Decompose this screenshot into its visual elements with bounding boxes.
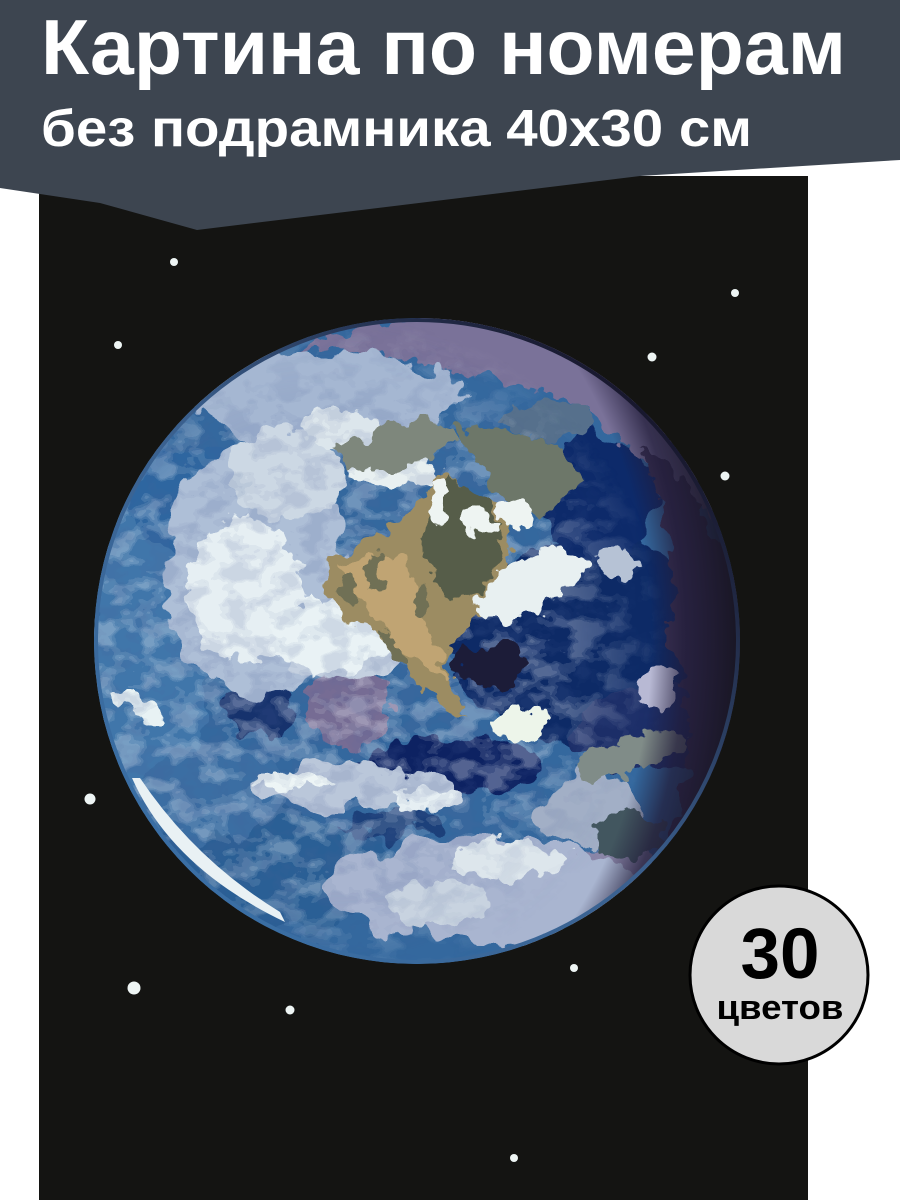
badge: 30 colours: 30 <box>741 915 819 994</box>
title: Картина по номерам <box>41 3 846 91</box>
purple limb <box>290 317 760 920</box>
soft light mottling <box>94 334 652 959</box>
badge: 30 colours <box>690 886 868 1064</box>
bright limb highlight <box>132 778 285 922</box>
ocean blues <box>90 435 730 930</box>
eastern clouds and Gulf <box>456 537 691 859</box>
dark side shading <box>578 368 740 916</box>
subtitle: без подрамника 40х30 см <box>41 100 752 158</box>
small white cloud patches over land <box>430 476 532 540</box>
land details <box>343 550 428 673</box>
badge: 30 colours: цветов <box>716 989 844 1027</box>
canvas background <box>39 176 808 1200</box>
clouds <box>165 352 640 940</box>
cloud texture <box>100 360 590 928</box>
North America landmass <box>325 415 585 715</box>
stars <box>84 258 739 1162</box>
globe rim <box>96 320 738 962</box>
header banner <box>0 0 900 230</box>
earth globe <box>90 315 760 965</box>
